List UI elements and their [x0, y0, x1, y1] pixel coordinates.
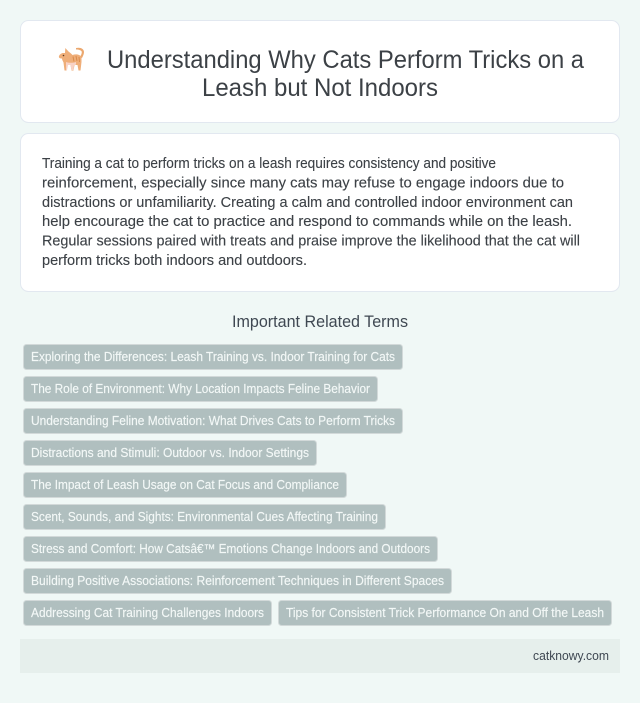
title text: Understanding Why Cats Perform Tricks on a	[107, 46, 584, 74]
tag 5	[24, 472, 346, 498]
tag 2	[24, 376, 378, 402]
heading: important related terms: Important Related Terms	[232, 313, 408, 331]
description text: distractions or unfamiliarity. Creating a calm and controlled indoor environment can	[42, 194, 573, 211]
description text: reinforcement, especially since many cats may refuse to engage indoors due to	[42, 174, 564, 191]
tag 6	[24, 504, 386, 530]
icon: cat	[59, 48, 84, 70]
tag 9: Addressing Cat Training Challenges Indoors	[31, 606, 264, 620]
tag 8: Building Positive Associations: Reinforcement Techniques in Different Spaces	[31, 574, 444, 588]
footer source text: catknowy.com	[533, 648, 609, 663]
tag 2: The Role of Environment: Why Location Impacts Feline Behavior	[31, 382, 370, 396]
tag 1: Exploring the Differences: Leash Training vs. Indoor Training for Cats	[31, 350, 395, 364]
description text: perform tricks both indoors and outdoors.	[42, 252, 307, 269]
panel: description	[20, 134, 620, 292]
tag 8	[24, 568, 452, 594]
related terms tags	[24, 344, 612, 626]
description text: help encourage the cat to practice and respond to commands while on the leash.	[42, 213, 572, 230]
tag 9	[24, 600, 272, 626]
tag 5: The Impact of Leash Usage on Cat Focus and Compliance	[31, 478, 339, 492]
footer	[20, 639, 620, 673]
tag 10	[278, 600, 612, 626]
title text	[107, 46, 584, 102]
tag 1	[24, 344, 402, 370]
tag 6: Scent, Sounds, and Sights: Environmental Cues Affecting Training	[31, 510, 378, 524]
tag 3: Understanding Feline Motivation: What Drives Cats to Perform Tricks	[31, 414, 395, 428]
tag 10: Tips for Consistent Trick Performance On and Off the Leash	[286, 606, 604, 620]
title text: Leash but Not Indoors	[202, 74, 438, 102]
title panel	[20, 20, 620, 122]
tag 3	[24, 408, 402, 434]
description text: Regular sessions paired with treats and praise improve the likelihood that the cat will	[42, 233, 580, 250]
tag 7: Stress and Comfort: How Catsâ€™ Emotions Change Indoors and Outdoors	[31, 542, 430, 556]
tag 7	[24, 536, 438, 562]
description text	[42, 155, 580, 269]
tag 4: Distractions and Stimuli: Outdoor vs. Indoor Settings	[31, 446, 309, 460]
description text: Training a cat to perform tricks on a leash requires consistency and positive	[42, 155, 496, 172]
tag 4	[24, 440, 316, 466]
